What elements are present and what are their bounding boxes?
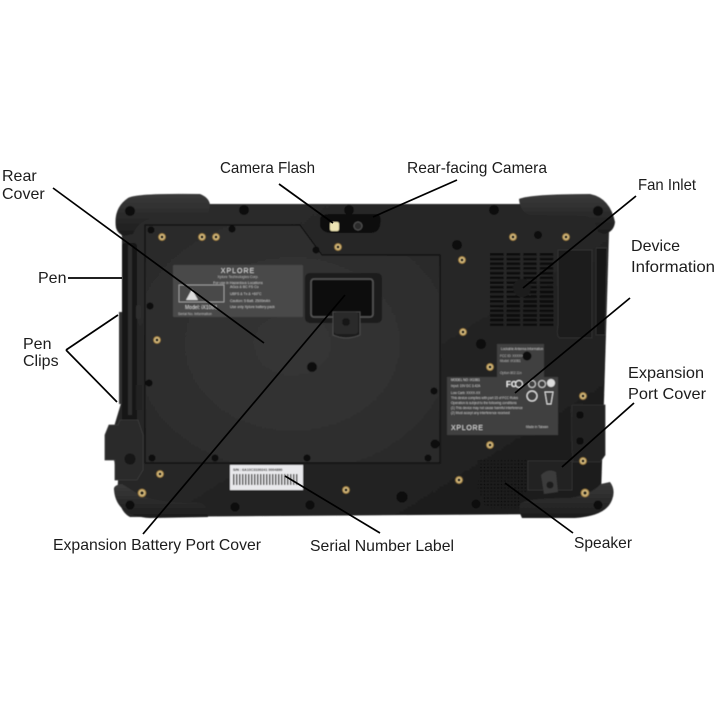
label: information: Information	[631, 259, 715, 276]
speaker grille	[478, 460, 528, 508]
expansion port hinge	[572, 405, 605, 462]
battery cover panel	[145, 225, 440, 463]
labels	[2, 160, 715, 555]
label: serial number label: Serial Number Label	[310, 538, 454, 555]
arrow: serial number label	[285, 476, 380, 533]
device information label: FC	[506, 380, 517, 389]
arrow: fan inlet	[523, 196, 636, 288]
bumper: top right	[519, 194, 615, 234]
top certification label: Model: iX10B1	[500, 359, 521, 363]
leader lines	[53, 180, 636, 534]
label: pen clips: Clips	[23, 353, 59, 370]
device information label: MODEL NO: iX10B1	[451, 378, 480, 382]
device information label: (2) Must accept any interference received	[451, 411, 510, 415]
expansion port cover	[528, 461, 572, 494]
bumper: bottom left	[114, 484, 208, 518]
product label: AGcs & BC FS Co	[230, 285, 259, 289]
arrow: speaker	[505, 483, 573, 533]
product label: Use only Xplore battery pack	[230, 305, 275, 309]
pen	[119, 243, 142, 423]
device information label: XPLORE	[451, 425, 484, 432]
label: rear-facing camera: Rear-facing Camera	[407, 160, 547, 177]
arrow: expansion battery port cover	[143, 295, 345, 534]
tablet body	[110, 204, 609, 517]
serial number label: S/N : 6A10C3100241 0004890	[233, 468, 282, 472]
product label: Xplore Technologies Corp.	[218, 275, 259, 279]
camera flash	[330, 222, 339, 231]
serial number label	[230, 465, 303, 490]
device information label: Operation is subject to the following conditions	[451, 401, 517, 405]
device information label: Low Carb: XXXX-XX	[451, 391, 481, 395]
device information label: Made in Taiwan	[526, 425, 548, 429]
right side latch	[596, 248, 607, 335]
camera lens	[354, 222, 362, 230]
top certification label: Lockable Antenna Information	[501, 347, 543, 351]
label: pen clips: Pen	[23, 336, 51, 353]
product label	[173, 265, 303, 317]
top certification label: Option 802.11n	[500, 371, 522, 375]
label: device: Device	[631, 238, 680, 255]
bumper: bottom right	[519, 482, 614, 518]
product label: Model: iX10B1	[185, 305, 218, 311]
device information label: This device complies with part 15 of FCC Rules	[451, 396, 518, 400]
top certification label	[497, 344, 544, 377]
arrow: camera flash	[279, 184, 333, 223]
screws	[138, 233, 590, 498]
label: pen: Pen	[38, 270, 66, 287]
expansion battery port	[305, 273, 382, 338]
arrow: pen clip lower	[66, 350, 117, 402]
device information label	[447, 377, 558, 435]
arrow: rear cover	[53, 188, 264, 343]
right recessed door	[557, 250, 592, 338]
device information label: (1) This device may not cause harmful interference	[451, 406, 523, 410]
product label: Serial No. Information	[178, 312, 212, 316]
dark fastener holes	[125, 205, 603, 512]
label: expansion battery port cover: Expansion Battery Port Cover	[53, 537, 262, 554]
arrow: pen clip upper	[66, 315, 118, 350]
product label: UBFS & Tx & +60°C	[230, 292, 262, 296]
label: rear cover: Cover	[2, 186, 45, 203]
label: speaker: Speaker	[574, 535, 633, 552]
top certification label: FCC ID: XXXXXXX	[500, 354, 528, 358]
product label: Caution: 5 Batt. 2500mAh	[230, 299, 270, 303]
arrow: expansion port cover	[562, 403, 634, 467]
fan inlet vent	[490, 253, 556, 326]
label: expansion: Expansion	[628, 365, 704, 382]
device information label: Input: 19V DC 3.42A	[451, 384, 481, 388]
label: fan inlet: Fan Inlet	[638, 177, 697, 194]
product label: XPLORE	[221, 268, 255, 275]
label: camera flash: Camera Flash	[220, 160, 315, 177]
tablet device	[105, 194, 615, 518]
arrow: rear-facing camera	[373, 180, 457, 217]
label: port cover: Port Cover	[628, 386, 707, 403]
camera module	[320, 214, 381, 233]
label: rear cover: Rear	[2, 168, 37, 185]
arrow: device information	[515, 298, 630, 393]
left latch hinge	[105, 420, 143, 480]
product label: For use in Hazardous Locations	[213, 281, 263, 285]
bumper: top left	[116, 194, 210, 236]
arrow: pen	[68, 277, 122, 279]
